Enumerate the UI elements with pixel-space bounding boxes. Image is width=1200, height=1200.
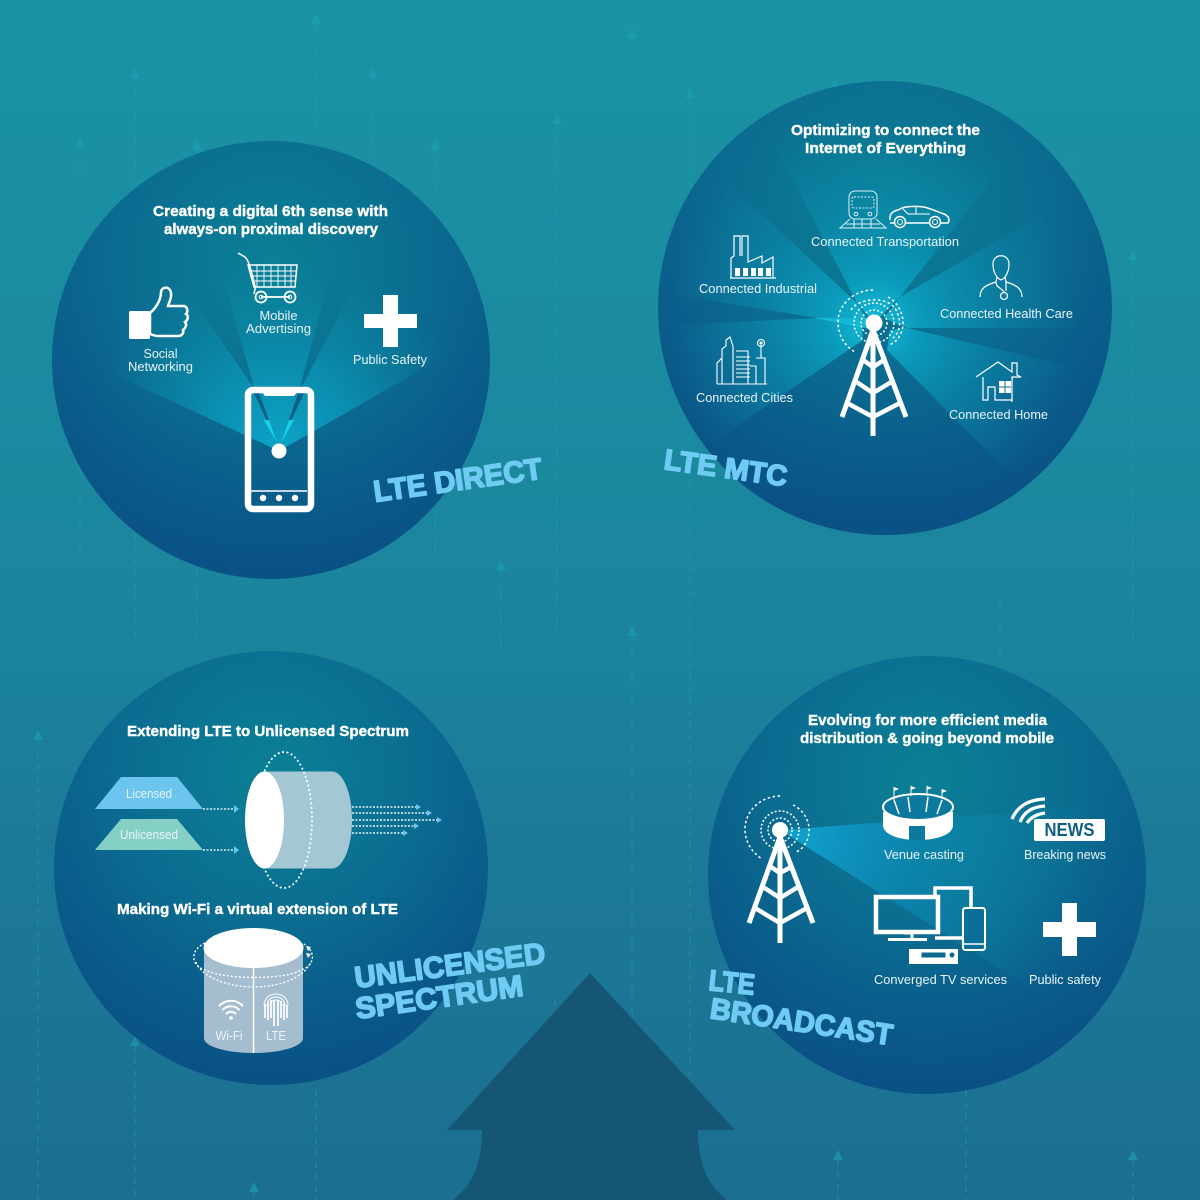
panel: LTE Direct [52,141,544,579]
label: connected health care: Connected Health Care [940,306,1073,321]
title: Unlicensed Spectrum: UNLICENSED [353,937,547,995]
signal beam [780,806,1100,1032]
icon: house [976,362,1021,402]
barrel: Wi-Fi and LTE: Wi-Fi [216,1028,243,1043]
trapezoid: licensed [95,777,203,809]
label: mobile advertising [246,308,311,336]
trapezoid: unlicensed: Unlicensed [120,827,178,842]
label: social networking: Social [144,346,178,361]
circle [54,651,488,1085]
label: mobile advertising: Advertising [246,321,311,336]
icon: thumbs up [129,288,188,339]
icon: medical cross [364,295,417,347]
icon: Wi-Fi [219,1001,243,1020]
label: venue casting: Venue casting [884,847,964,862]
big upward arrow [447,973,735,1200]
barrel: Wi-Fi and LTE [194,928,312,1053]
cylinder [245,752,352,888]
circle [658,81,1112,535]
heading: Optimizing to connect the [791,122,980,139]
circle [52,141,490,579]
circle [708,656,1146,1094]
bright streak [815,318,870,329]
label: public safety: Public safety [1029,972,1101,987]
title: LTE Direct: LTE DIRECT [371,453,544,509]
heading [153,203,388,238]
label: breaking news: Breaking news [1024,847,1106,862]
icon: news: NEWS [1044,820,1094,840]
arrows into cylinder [203,805,239,854]
signal beams [641,123,1100,500]
icon: factory [730,236,776,278]
label: social networking [128,346,193,374]
title: LTE MTC: LTE MTC [662,444,789,493]
heading: distribution & going beyond mobile [800,730,1054,747]
heading [800,712,1054,747]
title: Unlicensed Spectrum [353,937,547,1026]
heading: Creating a digital 6th sense with [153,203,388,220]
icon: TV and devices [876,888,985,964]
icon: news [1012,799,1105,841]
label: connected industrial: Connected Industrial [699,281,817,296]
icon: shopping cart [238,253,297,302]
panel: Unlicensed Spectrum [54,651,547,1085]
icon: stadium [883,786,953,840]
panel: LTE MTC [641,81,1112,535]
label: social networking: Networking [128,359,193,374]
heading: Evolving for more efficient media [808,712,1048,729]
trapezoid: licensed: Licensed [126,786,172,801]
icon: broadcast tower [745,796,813,943]
label: mobile advertising: Mobile [260,308,298,323]
title: LTE Broadcast: BROADCAST [708,992,895,1052]
title: LTE Broadcast: LTE [707,965,756,1002]
heading: extending LTE: Extending LTE to Unlicensed Spectrum [127,723,409,740]
icon: medical cross [1043,903,1096,956]
label: connected home: Connected Home [949,407,1048,422]
label: connected cities: Connected Cities [696,390,793,405]
label: converged TV services: Converged TV services [874,972,1007,987]
heading: Wi-Fi extension: Making Wi-Fi a virtual extension of LTE [117,901,398,918]
icon: LTE signal [264,994,288,1026]
panel: LTE Broadcast [707,656,1146,1094]
trapezoid: unlicensed [95,819,203,850]
icon: smartphone [248,390,311,509]
heading [791,122,980,157]
title: Unlicensed Spectrum: SPECTRUM [353,970,525,1026]
icon: health care worker [980,256,1022,300]
barrel: Wi-Fi and LTE: LTE [266,1028,286,1043]
label: connected transportation: Connected Transportation [811,234,959,249]
icon: cell tower [838,290,906,436]
icon: city [717,337,767,384]
heading: Internet of Everything [805,140,966,157]
title: LTE Broadcast [707,965,895,1052]
arrows out of cylinder [352,804,442,836]
heading: always-on proximal discovery [164,221,379,238]
label: public safety: Public Safety [353,352,427,367]
icon: train and car [840,191,949,228]
signal beams [90,250,470,451]
